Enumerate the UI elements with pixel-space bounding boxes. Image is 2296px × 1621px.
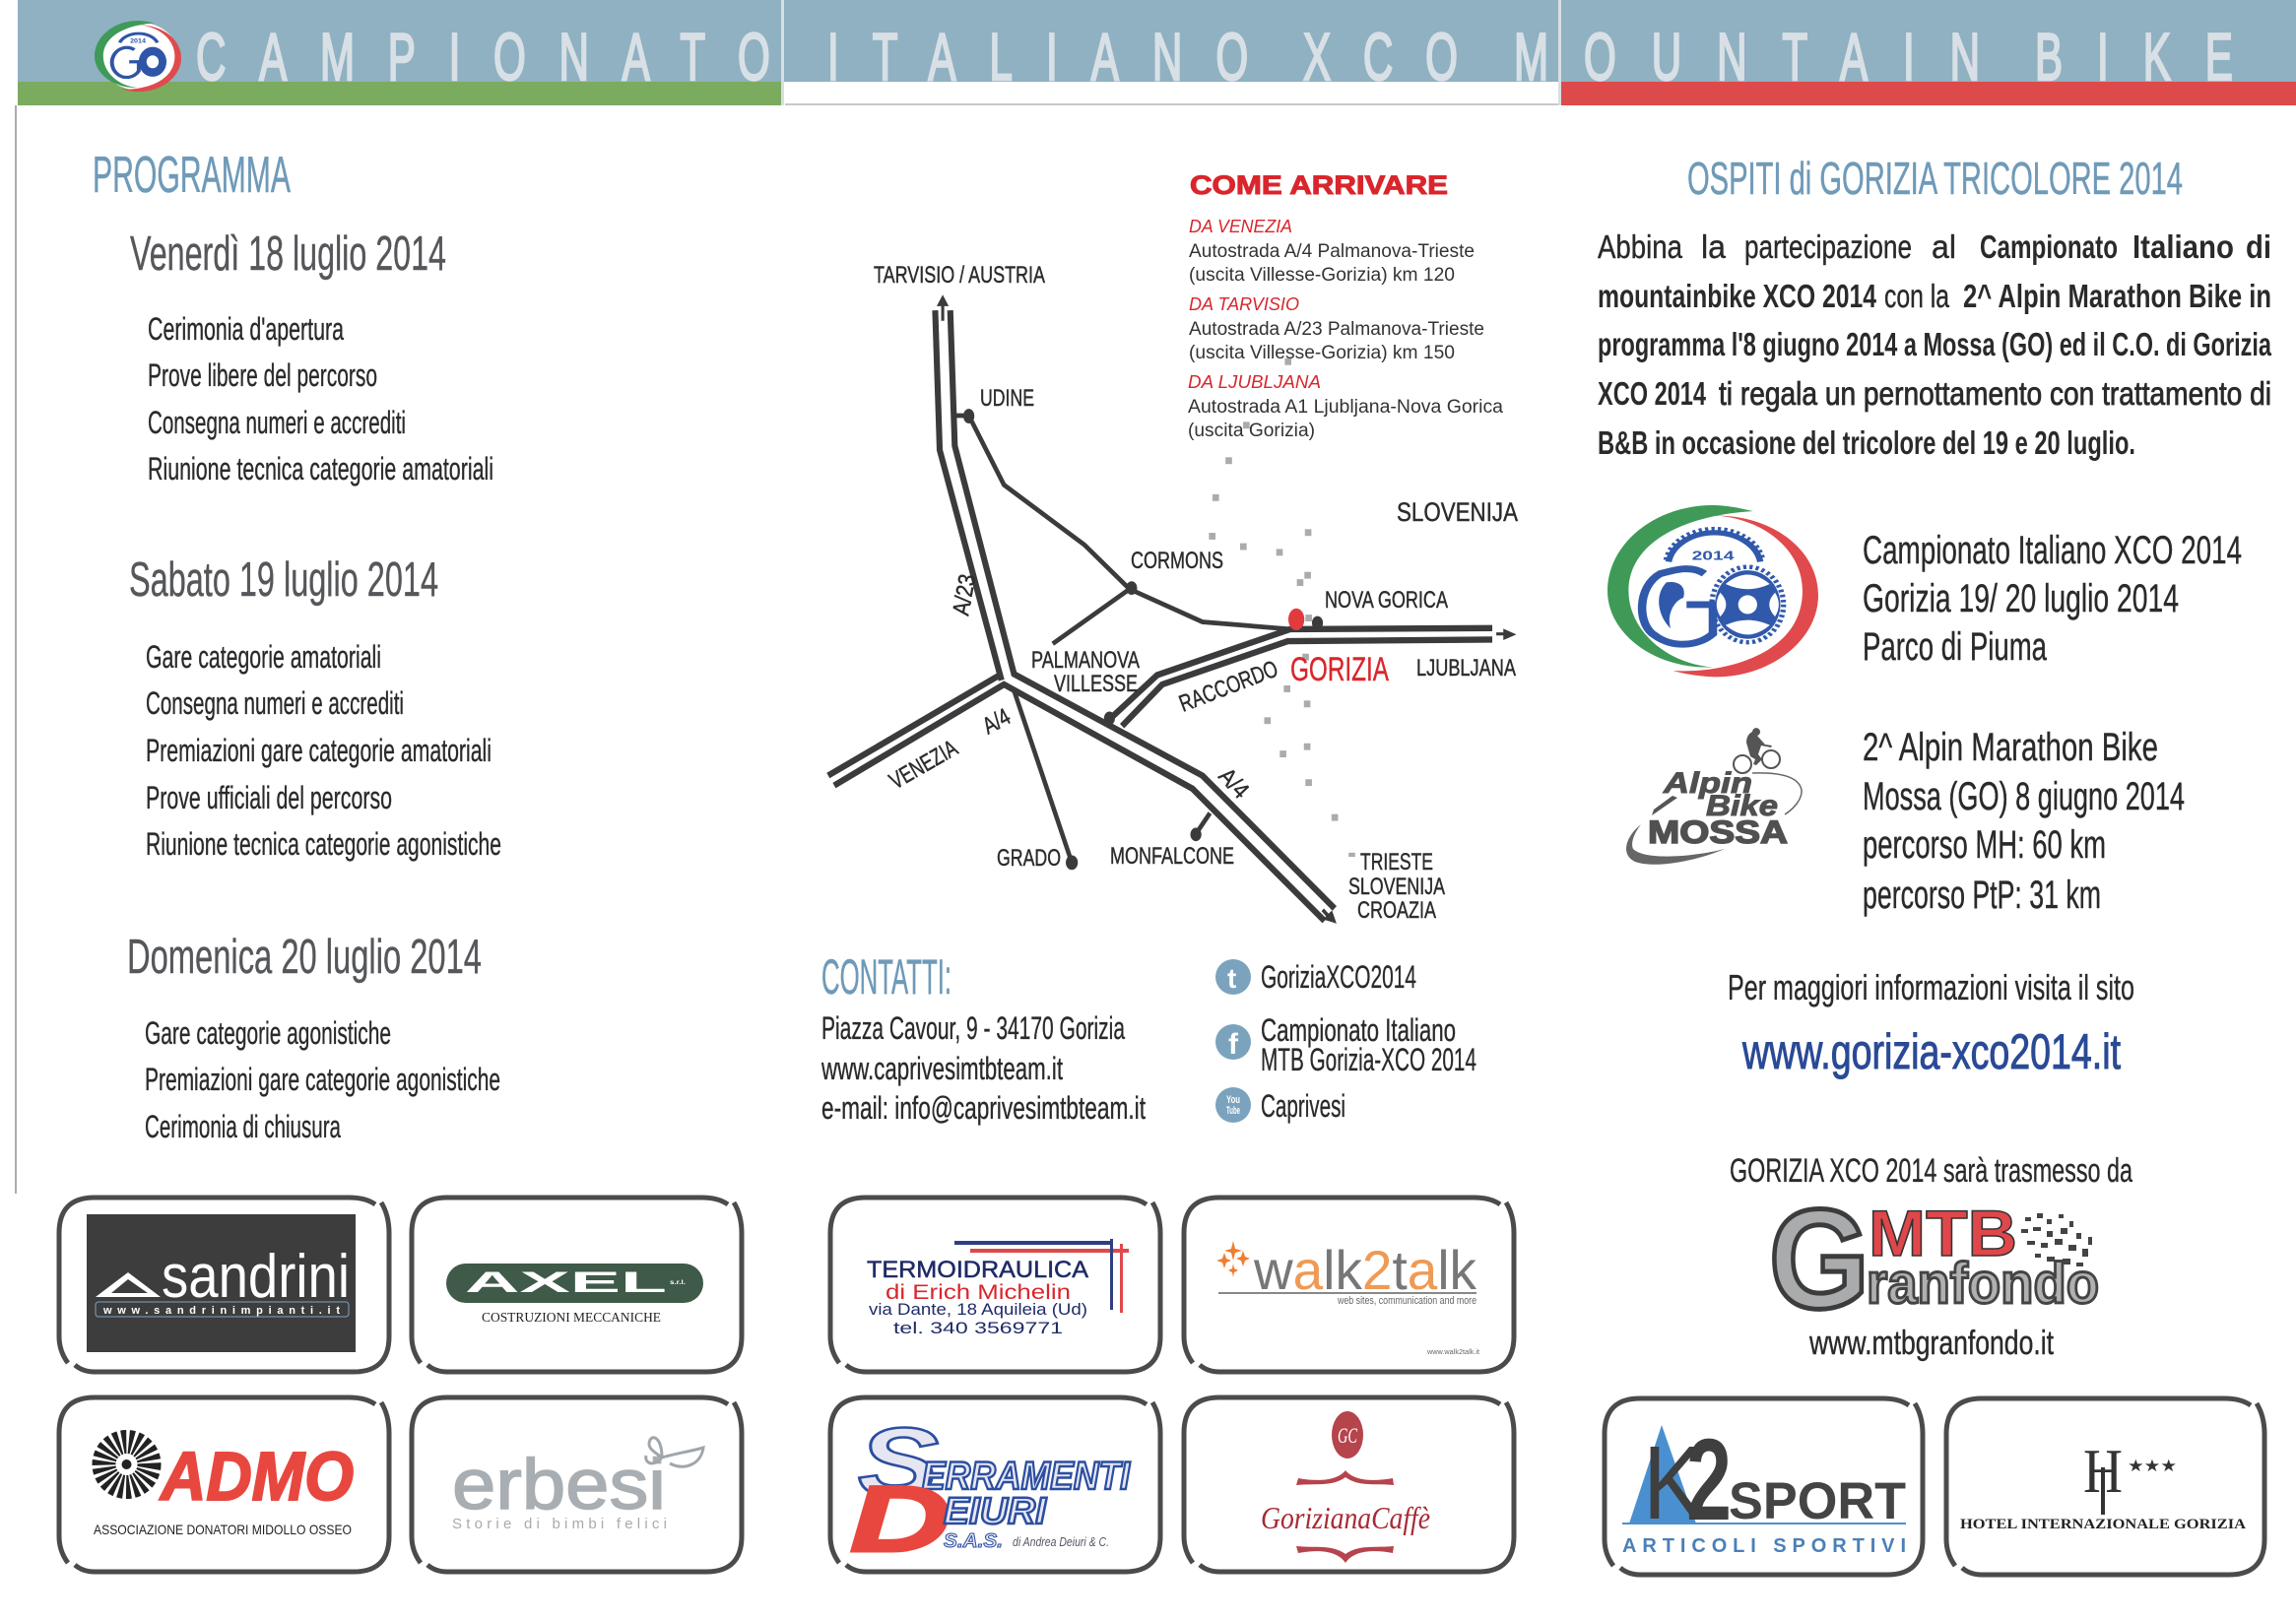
sponsor card: K2 Sport (1605, 1398, 1923, 1575)
sponsor card: walk2talk: www.walk2talk.it (1426, 1349, 1479, 1356)
sponsor card: Termoidraulica: TERMOIDRAULICA (867, 1257, 1088, 1283)
panel: Saturday programme (129, 553, 501, 862)
text block: offer paragraph: di (2246, 228, 2271, 265)
sponsor card: K2 Sport: 2 (1686, 1415, 1732, 1545)
left fold edge line (15, 105, 17, 1194)
header title (196, 20, 2233, 94)
text block: Campionato Italiano details (1863, 529, 2242, 669)
panel: Sunday programme: Domenica 20 luglio 2014 (127, 931, 482, 984)
panel: come arrivare directions: DA VENEZIA (1189, 217, 1292, 236)
sponsor card: walk2talk: web sites, communication and more (1337, 1295, 1476, 1307)
logo: Alpin Bike Mossa: MOSSA (1648, 814, 1788, 850)
road map: CORMONS (1131, 548, 1223, 574)
heading: PROGRAMMA: PROGRAMMA (93, 147, 291, 204)
sponsor card: Hotel Internazionale: HOTEL INTERNAZIONALE GORIZIA (1960, 1517, 2246, 1532)
panel: social links: MTB Gorizia-XCO 2014 (1261, 1042, 1476, 1077)
logo: Alpin Bike Mossa (1626, 728, 1802, 865)
road map: PALMANOVA (1031, 647, 1140, 674)
sponsor card: Sandrini (59, 1198, 389, 1372)
road map: LJUBLJANA (1416, 655, 1516, 681)
road map: GORIZIA (1290, 651, 1389, 688)
road map: TARVISIO / AUSTRIA (874, 262, 1045, 289)
panel: come arrivare directions: (uscita Gorizia) (1188, 421, 1315, 441)
text block: offer paragraph: con la (1884, 278, 1949, 314)
panel: Friday programme: Cerimonia d'apertura (148, 311, 344, 347)
panel: Saturday programme: Premiazioni gare categorie amatoriali (146, 733, 492, 768)
sponsor card: Termoidraulica: di Erich Michelin (886, 1281, 1071, 1304)
sponsor card: Serramenti Deiuri: S.A.S. (944, 1530, 1003, 1552)
road map: GRADO (997, 845, 1061, 872)
panel: Sunday programme: Cerimonia di chiusura (145, 1109, 341, 1144)
road map: A/23 (948, 572, 981, 617)
sponsor card: Goriziana Caffe: GC (1338, 1423, 1357, 1448)
panel: come arrivare directions: Autostrada A/4 Palmanova-Trieste (1189, 241, 1475, 262)
text block: more information: www.gorizia-xco2014.it (1741, 1024, 2121, 1079)
sponsor card: Termoidraulica: via Dante, 18 Aquileia (Ud) (869, 1300, 1087, 1319)
sponsor card: Serramenti Deiuri: ERRAMENTI (922, 1455, 1131, 1498)
logo: Gorizia GO 2014: 2014 (1692, 550, 1736, 563)
sponsor card: Erbesi (412, 1397, 742, 1572)
sponsor card: Erbesi: erbesi (452, 1446, 666, 1524)
panel: social links: Caprivesi (1261, 1088, 1345, 1124)
text block: Alpin Marathon details: percorso PtP: 31 km (1863, 874, 2101, 917)
text block: offer paragraph: mountainbike XCO 2014 (1598, 278, 1876, 314)
sponsor card: Axel: s.r.l. (670, 1280, 686, 1286)
sponsor card: Serramenti Deiuri (830, 1397, 1160, 1572)
sponsor card: Goriziana Caffe (1184, 1397, 1514, 1572)
panel: social links: You (1226, 1094, 1240, 1106)
panel: Saturday programme: Sabato 19 luglio 2014 (129, 553, 438, 607)
sponsor card: K2 Sport: ARTICOLI SPORTIVI (1622, 1535, 1906, 1557)
road map: MONFALCONE (1110, 843, 1234, 870)
header title: BIKE (2035, 20, 2233, 94)
panel: contatti: e-mail: info@caprivesimtbteam.it (821, 1090, 1146, 1126)
sponsor card: Axel: AXEL (465, 1266, 667, 1299)
sponsor card: Sandrini: www.sandrinimpianti.it (102, 1305, 340, 1317)
panel: contatti: www.caprivesimtbteam.it (820, 1051, 1063, 1086)
sponsor card: Hotel Internazionale (1946, 1398, 2264, 1575)
sponsor card: K2 Sport: K (1643, 1425, 1704, 1541)
panel: contatti: CONTATTI: (821, 949, 951, 1005)
panel: come arrivare directions: DA TARVISIO (1189, 294, 1299, 314)
road map: SLOVENIJA (1397, 497, 1518, 527)
panel: come arrivare directions: Autostrada A1 Ljubljana-Nova Gorica (1188, 397, 1503, 418)
road map: VILLESSE (1054, 671, 1138, 697)
small GO logo in header (95, 21, 181, 92)
road map: UDINE (980, 385, 1034, 412)
sponsor card: K2 Sport: SPORT (1729, 1472, 1906, 1530)
sponsor card: Sandrini: sandrini (162, 1243, 350, 1311)
panel: social links: GoriziaXCO2014 (1261, 959, 1416, 995)
panel: come arrivare directions (1188, 170, 1503, 441)
text block: more information: Per maggiori informazioni visita il sito (1728, 967, 2134, 1007)
text block: more information (1728, 967, 2134, 1079)
panel: social links (1215, 959, 1476, 1124)
road map: NOVA GORICA (1325, 587, 1448, 614)
panel: come arrivare directions: Autostrada A/23 Palmanova-Trieste (1189, 319, 1484, 340)
panel: come arrivare directions: (uscita Villesse-Gorizia) km 150 (1189, 343, 1455, 363)
logo: MTB Granfondo: ranfondo (1867, 1252, 2099, 1316)
text block: Alpin Marathon details: 2^ Alpin Marathon Bike (1863, 726, 2158, 769)
road map: RACCORDO (1175, 656, 1281, 718)
header title: XCO (1303, 20, 1458, 94)
sponsor card: Erbesi: Storie di bimbi felici (452, 1516, 667, 1532)
panel: contatti (820, 949, 1146, 1126)
sponsor card: Serramenti Deiuri: di Andrea Deiuri & C. (1013, 1534, 1109, 1549)
text block: offer paragraph (1598, 228, 2271, 461)
text block: Campionato Italiano details: Parco di Piuma (1863, 625, 2048, 669)
road map: SLOVENIJA (1348, 874, 1445, 900)
road map: A/4 (1214, 763, 1254, 804)
sponsor card: Serramenti Deiuri: EIURI (944, 1491, 1047, 1532)
panel: come arrivare directions: (uscita Villesse-Gorizia) km 120 (1189, 265, 1455, 286)
sponsor card: ADMO: ADMO (159, 1438, 354, 1515)
text: mtbgranfondo url: www.mtbgranfondo.it (1808, 1325, 2054, 1362)
logo: MTB Granfondo (1769, 1180, 2099, 1338)
sponsor card: Hotel Internazionale: ★★★ (2128, 1457, 2177, 1476)
panel: Saturday programme: Prove ufficiali del percorso (146, 780, 392, 815)
text block: offer paragraph: partecipazione (1744, 228, 1912, 265)
panel: social links: f (1228, 1028, 1239, 1061)
sponsor card: walk2talk (1184, 1198, 1514, 1372)
sponsor card: ADMO: ASSOCIAZIONE DONATORI MIDOLLO OSSEO (94, 1522, 352, 1537)
panel: Sunday programme: Premiazioni gare categorie agonistiche (145, 1062, 500, 1097)
text block: Alpin Marathon details: percorso MH: 60 km (1863, 823, 2106, 867)
panel: Friday programme: Consegna numeri e accrediti (148, 405, 406, 440)
panel: contatti: Piazza Cavour, 9 - 34170 Gorizia (821, 1010, 1125, 1046)
panel: social links: Campionato Italiano (1261, 1012, 1456, 1048)
panel: social links: Tube (1226, 1105, 1240, 1117)
header title: ITALIANO (827, 20, 1248, 94)
panel: Friday programme: Venerdì 18 luglio 2014 (130, 227, 446, 281)
panel: Sunday programme (127, 931, 500, 1144)
panel: Sunday programme: Gare categorie agonistiche (145, 1015, 391, 1051)
road map: VENEZIA (885, 735, 962, 795)
panel: social links: t (1227, 963, 1236, 994)
sponsor card: Termoidraulica (830, 1198, 1160, 1372)
road map: TRIESTE (1360, 849, 1433, 875)
road map (828, 262, 1518, 924)
text block: Alpin Marathon details (1863, 726, 2185, 917)
panel: Friday programme: Riunione tecnica categorie amatoriali (148, 451, 493, 486)
panel: come arrivare directions: DA LJUBLJANA (1188, 372, 1321, 392)
logo: MTB Granfondo: MTB (1869, 1197, 2017, 1269)
sponsor card: Axel (412, 1198, 742, 1372)
header title: CAMPIONATO (196, 20, 770, 94)
sponsor card: walk2talk: walk2talk (1253, 1239, 1477, 1301)
small GO logo in header: 2014 (130, 36, 146, 44)
sponsor card: Axel: COSTRUZIONI MECCANICHE (482, 1311, 661, 1326)
sponsor card: Serramenti Deiuri: D (850, 1467, 951, 1572)
sponsor card: ADMO (59, 1397, 389, 1572)
road map: A/4 (978, 703, 1016, 740)
text block: offer paragraph: al (1932, 228, 1956, 265)
sponsor card: Hotel Internazionale: H (2083, 1436, 2123, 1506)
road map: CROAZIA (1357, 897, 1436, 924)
panel: Saturday programme: Riunione tecnica categorie agonistiche (146, 826, 501, 862)
logo: Alpin Bike Mossa: Bike (1706, 790, 1778, 822)
text block: offer paragraph: la (1701, 228, 1727, 265)
header band (18, 0, 2296, 105)
panel: come arrivare directions: COME ARRIVARE (1190, 170, 1448, 200)
panel: Friday programme: Prove libere del percorso (148, 357, 377, 393)
header title: MOUNTAIN (1514, 20, 1980, 94)
logo: MTB Granfondo: G (1769, 1180, 1870, 1338)
panel: Saturday programme: Gare categorie amatoriali (146, 639, 381, 675)
text block: offer paragraph: Campionato (1980, 228, 2118, 265)
text block: offer paragraph: Abbina (1598, 228, 1683, 265)
panel: Saturday programme: Consegna numeri e accrediti (146, 685, 404, 721)
logo: Gorizia GO 2014 (1607, 505, 1818, 677)
sponsor card: Termoidraulica: tel. 340 3569771 (893, 1319, 1063, 1337)
text block: offer paragraph: Italiano (2132, 228, 2234, 265)
panel: Friday programme (130, 227, 493, 486)
sponsor card: Goriziana Caffe: GorizianaCaffè (1261, 1500, 1430, 1535)
sponsor card: Serramenti Deiuri: S (858, 1407, 939, 1516)
logo: Alpin Bike Mossa: Alpin (1663, 767, 1752, 800)
text block: offer paragraph: XCO 2014 (1598, 375, 1706, 412)
